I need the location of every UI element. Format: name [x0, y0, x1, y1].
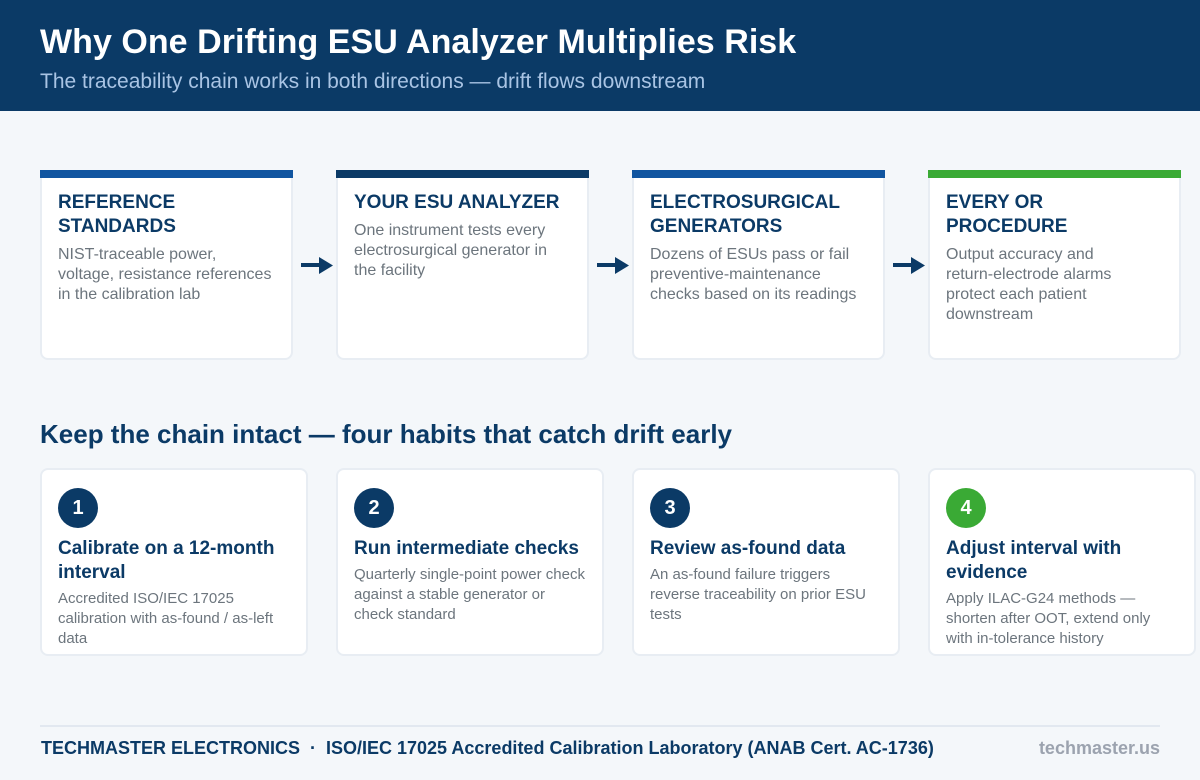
heading: your ESU analyzer: YOUR ESU ANALYZER [354, 192, 560, 213]
text: every OR procedure: return-electrode alarms [946, 266, 1111, 283]
badge 4: 4 [960, 497, 972, 519]
panel: electrosurgical generators [632, 170, 885, 360]
heading: habit 1: Calibrate on a 12-month interval [58, 538, 274, 583]
badge 1: 1 [72, 497, 84, 519]
panel: every OR procedure [928, 170, 1181, 360]
text: electrosurgical generators: Dozens of ESUs pass or fail preventive-maintenance checks based on its readings [650, 246, 856, 303]
badge 3 [650, 488, 690, 528]
heading: habit 3: Review as-found data [650, 538, 845, 559]
text: habit 4: Apply ILAC-G24 methods — shorten after OOT, extend only with in-tolerance history [946, 590, 1150, 647]
heading: reference standards: REFERENCE STANDARDS [58, 192, 176, 237]
text: habit 2: Quarterly single-point power check against a stable generator or check standard [354, 566, 585, 623]
text: reference standards: NIST-traceable power, voltage, resistance references in the calibration lab [58, 246, 271, 303]
panel: habit 3 [632, 468, 900, 656]
badge 3: 3 [664, 497, 676, 519]
footer accreditation: TECHMASTER ELECTRONICS · ISO/IEC 17025 Accredited Calibration Laboratory (ANAB Cert. AC-1736) [41, 738, 934, 758]
panel: habit 2 [336, 468, 604, 656]
heading: every OR procedure: EVERY OR PROCEDURE [946, 192, 1067, 237]
section heading: Keep the chain intact — four habits that catch drift early [40, 419, 732, 449]
footer website: techmaster.us [1039, 738, 1160, 758]
badge 2: 2 [368, 497, 380, 519]
heading: habit 4: Adjust interval with evidence [946, 538, 1121, 583]
panel: your ESU analyzer [336, 170, 589, 360]
header banner [0, 0, 1200, 111]
panel: habit 1 [40, 468, 308, 656]
text: every OR procedure: protect each patient [946, 286, 1087, 303]
title: Why One Drifting ESU Analyzer Multiplies Risk [40, 23, 796, 61]
badge 2 [354, 488, 394, 528]
text: every OR procedure: downstream [946, 306, 1033, 323]
arrow 2 [597, 257, 629, 274]
badge 1 [58, 488, 98, 528]
panel: reference standards [40, 170, 293, 360]
text: habit 1: Accredited ISO/IEC 17025 calibration with as-found / as-left data [58, 590, 273, 647]
text: your ESU analyzer: One instrument tests every electrosurgical generator in the facility [354, 222, 547, 279]
text: every OR procedure [946, 246, 1111, 323]
subtitle: The traceability chain works in both directions — drift flows downstream [40, 70, 705, 93]
heading: habit 2: Run intermediate checks [354, 538, 579, 559]
heading: electrosurgical generators: ELECTROSURGICAL GENERATORS [650, 192, 840, 237]
panel: habit 4 [928, 468, 1196, 656]
arrow 1 [301, 257, 333, 274]
text: habit 3: An as-found failure triggers reverse traceability on prior ESU tests [650, 566, 866, 623]
badge 4 [946, 488, 986, 528]
text: every OR procedure: Output accuracy and [946, 246, 1094, 263]
arrow 3 [893, 257, 925, 274]
